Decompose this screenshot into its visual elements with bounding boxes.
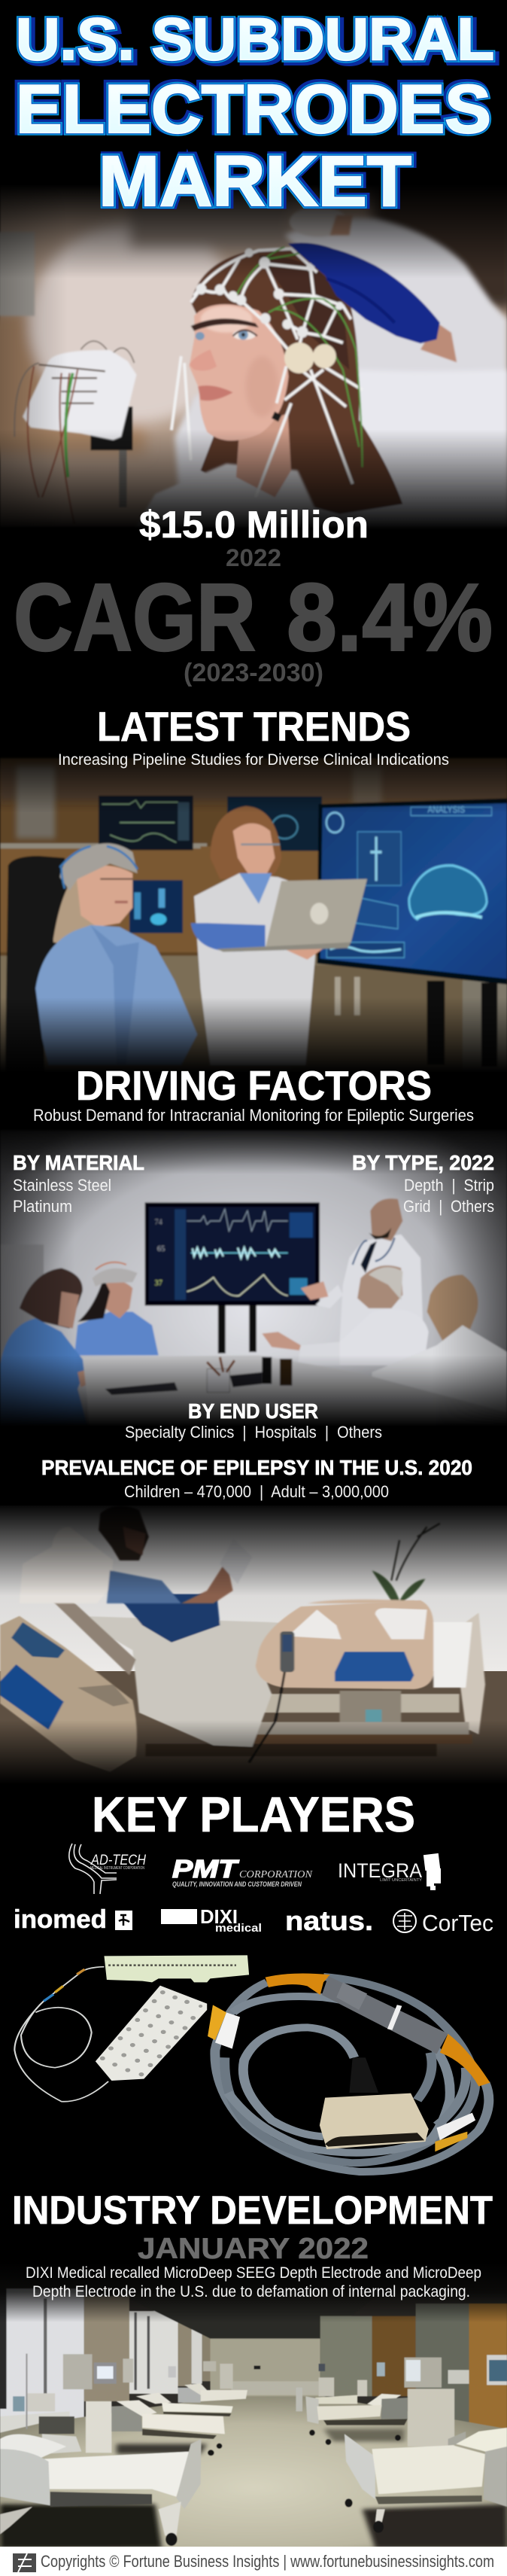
black strain relief bbox=[349, 2057, 378, 2093]
logo: CorTec bbox=[393, 1910, 493, 1936]
driving factors description: Robust Demand for Intracranial Monitoring for Epileptic Surgeries bbox=[33, 1106, 474, 1125]
wall monitor with vital signs: 65 bbox=[157, 1245, 165, 1253]
back monitor left bbox=[99, 796, 193, 850]
wall monitor with vital signs bbox=[145, 1202, 320, 1305]
left row of beds bbox=[111, 2383, 247, 2456]
title line 1: U.S. SUBDURAL bbox=[16, 5, 494, 72]
logo: AD-Tech: AD-TECH bbox=[90, 1853, 146, 1868]
logo: DIXI Medical: medical bbox=[215, 1922, 262, 1935]
title line 1: U.S. SUBDURAL bbox=[16, 5, 494, 72]
logo: AD-Tech: MEDICAL INSTRUMENT CORPORATION bbox=[90, 1866, 144, 1871]
front left bed bbox=[0, 2434, 201, 2546]
segment: by material: Stainless Steel bbox=[13, 1176, 111, 1195]
CAGR figure: CAGR bbox=[14, 564, 256, 671]
wall monitor with vital signs: 37 bbox=[155, 1280, 162, 1288]
chair bbox=[5, 856, 68, 1092]
doctor in white coat bbox=[175, 207, 507, 527]
segment: by material: BY MATERIAL bbox=[13, 1151, 144, 1174]
hero photo: patient wearing electrode cap bbox=[0, 0, 507, 575]
icon: Fortune Business Insights logo bbox=[13, 2553, 36, 2572]
logo: DIXI Medical: DIXI bbox=[200, 1905, 238, 1928]
cabinets bbox=[0, 956, 507, 1092]
segment: by end user bbox=[125, 1399, 382, 1442]
development date: JANUARY 2022 bbox=[138, 2233, 369, 2265]
second bed bbox=[111, 2400, 225, 2456]
large analysis monitor: ANALYSIS bbox=[427, 805, 466, 815]
electrode cap net bbox=[172, 248, 363, 498]
logo: Natus: natus. bbox=[285, 1905, 373, 1936]
company logos bbox=[14, 1844, 493, 1936]
logo: AD-Tech bbox=[69, 1844, 146, 1894]
logo: PMT Corporation bbox=[172, 1855, 313, 1888]
ceiling bbox=[129, 2298, 372, 2339]
right walls bbox=[320, 2316, 372, 2396]
title line 3: MARKET bbox=[99, 142, 411, 221]
far bed and headboard bbox=[433, 1612, 485, 1734]
market size value: $15.0 Million bbox=[139, 504, 369, 546]
prevalence statistics bbox=[41, 1456, 472, 1501]
blue glove bbox=[288, 242, 440, 343]
shelves bbox=[0, 1244, 44, 1362]
logo: PMT Corporation: CORPORATION bbox=[239, 1869, 313, 1880]
development description: Depth Electrode in the U.S. due to defamation of internal packaging. bbox=[32, 2283, 470, 2300]
title line 2: ELECTRODES bbox=[16, 72, 491, 148]
back monitor right bbox=[227, 796, 322, 851]
under-bed shadows bbox=[0, 2429, 507, 2548]
wall monitor with vital signs: 74 bbox=[155, 1218, 163, 1226]
key players heading: KEY PLAYERS bbox=[92, 1786, 415, 1842]
EEG device bbox=[14, 341, 136, 524]
seated older doctor bbox=[262, 1265, 429, 1366]
large analysis monitor bbox=[317, 799, 507, 1067]
segment: by material bbox=[13, 1151, 144, 1216]
right row of beds bbox=[296, 2388, 408, 2445]
logo: PMT Corporation: PMT bbox=[172, 1855, 239, 1883]
hand remote bbox=[249, 1631, 294, 1762]
reclined backrest bbox=[42, 1591, 136, 1675]
prevalence statistics: PREVALENCE OF EPILEPSY IN THE U.S. 2020 bbox=[41, 1456, 472, 1479]
doctor with laptop bbox=[191, 806, 367, 1065]
hospital bed photo bbox=[0, 1502, 507, 2009]
logo: Integra: INTEGRA bbox=[338, 1859, 422, 1882]
logo: Integra: LIMIT UNCERTAINTY bbox=[380, 1878, 423, 1883]
segment: by type: Depth | Strip bbox=[404, 1176, 494, 1195]
development description bbox=[26, 2264, 481, 2300]
table bbox=[83, 1356, 507, 1487]
gown and neck bbox=[136, 464, 323, 527]
bed frame bbox=[259, 1694, 460, 1713]
wall picture bbox=[0, 232, 35, 316]
patient torso and head bbox=[99, 1506, 233, 1603]
base year: 2022 bbox=[226, 544, 281, 571]
meeting photo bbox=[0, 1122, 507, 1504]
segment: by type: Grid | Others bbox=[403, 1197, 494, 1216]
small monitor bbox=[129, 880, 183, 933]
left side rail bbox=[0, 1616, 137, 1772]
title bbox=[14, 5, 497, 221]
title line 3: MARKET bbox=[100, 141, 413, 221]
wire loop bbox=[14, 1967, 108, 2102]
cable coils bbox=[215, 1977, 489, 2172]
title line 2: ELECTRODES bbox=[16, 72, 491, 148]
medical equipment bbox=[63, 2354, 507, 2453]
latest trends heading: LATEST TRENDS bbox=[97, 703, 411, 750]
segment: by type bbox=[352, 1151, 494, 1216]
segment: by material: Platinum bbox=[13, 1197, 72, 1216]
pajama bbox=[117, 1594, 220, 1643]
forecast period: (2023-2030) bbox=[184, 659, 323, 687]
logo: Integra bbox=[338, 1853, 441, 1890]
front right bed bbox=[345, 2428, 507, 2533]
subdural electrode product bbox=[14, 1955, 249, 2102]
blanket bbox=[74, 1616, 323, 1747]
third bed bbox=[136, 2392, 233, 2416]
title line 2: ELECTRODES bbox=[16, 72, 491, 148]
logo: DIXI Medical bbox=[161, 1905, 262, 1935]
footer bar bbox=[0, 2547, 507, 2576]
pillows bbox=[20, 1527, 113, 1603]
far left bed bbox=[178, 2383, 247, 2403]
title line 3: MARKET bbox=[99, 142, 411, 221]
patient with electrode cap bbox=[74, 1262, 159, 1356]
latest trends description: Increasing Pipeline Studies for Diverse Clinical Indications bbox=[58, 751, 449, 769]
left window sill bbox=[0, 2354, 74, 2434]
beige connector bbox=[320, 2093, 429, 2149]
cable label bbox=[208, 2005, 240, 2049]
logo: CorTec: CorTec bbox=[422, 1910, 493, 1936]
title line 2: ELECTRODES bbox=[14, 70, 490, 146]
seated patient bbox=[35, 843, 197, 1065]
connector cable bbox=[208, 1973, 490, 2172]
CAGR figure bbox=[14, 564, 493, 671]
right side rail bbox=[256, 1600, 433, 1689]
hospital ward photo bbox=[0, 2228, 507, 2548]
shelf bbox=[0, 843, 207, 848]
book bbox=[220, 1539, 252, 1584]
second label bbox=[435, 2113, 475, 2151]
segment: by end user: Specialty Clinics | Hospitals | Others bbox=[125, 1423, 382, 1442]
windows on left bbox=[0, 2288, 84, 2419]
CAGR figure: 8.4% bbox=[287, 564, 493, 671]
patient face bbox=[190, 304, 289, 440]
segment: by end user: BY END USER bbox=[188, 1399, 318, 1423]
title line 1: U.S. SUBDURAL bbox=[19, 8, 497, 75]
segment: by type: BY TYPE, 2022 bbox=[352, 1151, 494, 1174]
electrode grid bbox=[96, 1986, 207, 2081]
far wall bbox=[211, 2339, 320, 2397]
plant bbox=[307, 1524, 440, 1603]
orange sleeves bbox=[266, 1973, 490, 2087]
latest trends photo bbox=[0, 741, 507, 1125]
seated woman far right bbox=[372, 1274, 507, 1430]
prevalence statistics: Children – 470,000 | Adult – 3,000,000 bbox=[124, 1482, 389, 1501]
logo: inomed: inomed bbox=[14, 1905, 107, 1934]
grey plug bbox=[322, 1976, 448, 2054]
title line 3: MARKET bbox=[99, 142, 411, 221]
electrode strip bbox=[104, 1955, 249, 1982]
title line 1: U.S. SUBDURAL bbox=[16, 5, 494, 72]
floor bbox=[0, 2396, 507, 2548]
logo: PMT Corporation: QUALITY, INNOVATION AND CUSTOMER DRIVEN bbox=[172, 1880, 302, 1888]
monitor stands bbox=[218, 1305, 257, 1353]
nurse bbox=[0, 1268, 115, 1426]
patient hair bbox=[191, 248, 402, 514]
driving factors heading: DRIVING FACTORS bbox=[76, 1062, 432, 1109]
standing doctor bbox=[301, 1198, 424, 1345]
